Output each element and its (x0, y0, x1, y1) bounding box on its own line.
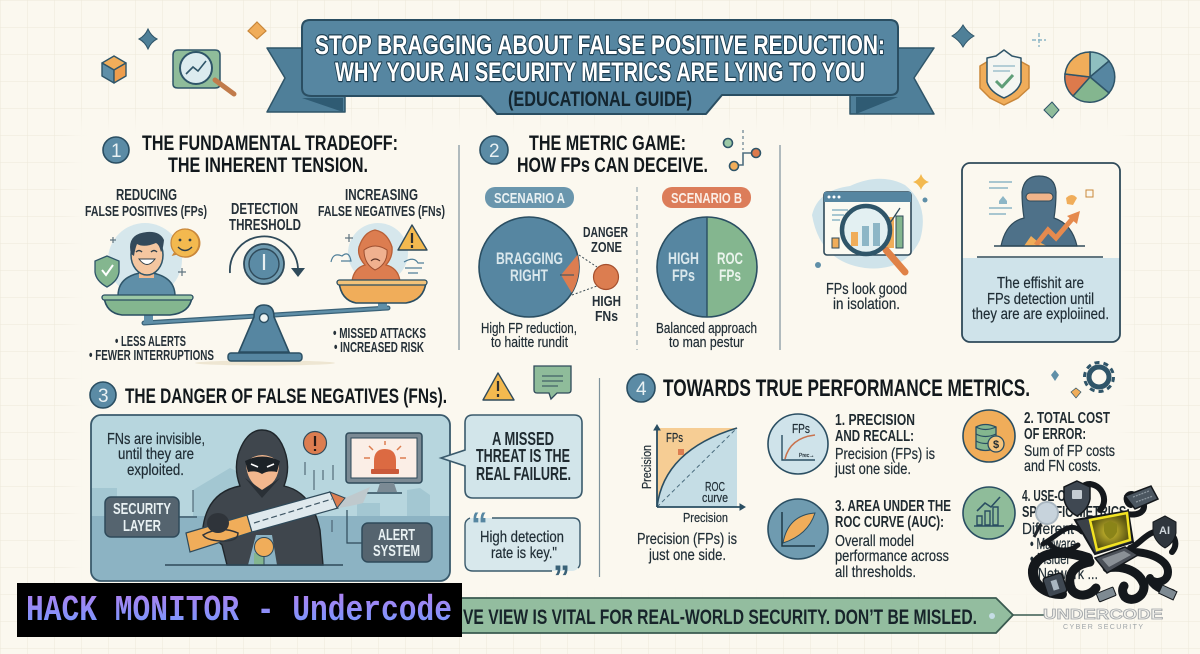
octopus logo (1033, 481, 1177, 631)
card: exploited (962, 163, 1120, 342)
title line 1: STOP BRAGGING ABOUT FALSE POSITIVE REDUCTION: (315, 30, 885, 60)
badge 1 (103, 137, 129, 163)
metric 3: area under roc curve: Overall model (835, 533, 914, 550)
icon: shield badge (980, 50, 1029, 105)
callout: missed threat: REAL FAILURE. (476, 464, 571, 484)
metric 4: use specific metrics: SPECIFIC METRICS: (1022, 504, 1130, 521)
ribbon tail right (850, 48, 934, 114)
callout: missed threat (441, 415, 582, 498)
alert system box: SYSTEM (373, 543, 420, 560)
icon: happy analyst (95, 223, 200, 297)
caption fps in isolation (826, 281, 907, 313)
subtitle: (EDUCATIONAL GUIDE) (508, 88, 692, 111)
section 2 heading (517, 132, 708, 177)
keyboard icon (1125, 486, 1158, 509)
quote box (465, 506, 580, 597)
badge 2: 2 (489, 141, 500, 162)
ai shield icon: AI (1159, 525, 1170, 537)
section 1 heading (142, 132, 398, 177)
list: fp benefits: • LESS ALERTS (115, 333, 186, 350)
metric 3: area under roc curve: 3. AREA UNDER THE (835, 498, 951, 515)
callout: missed threat: THREAT IS THE (476, 446, 570, 466)
metric 4: use specific metrics: 4. USE-CASE (1022, 488, 1086, 505)
section 3: danger of false negatives (90, 366, 582, 597)
icon: blue diamond (139, 29, 157, 49)
list: fn risks: • MISSED ATTACKS (333, 325, 426, 342)
label: increasing false negatives (318, 187, 445, 220)
card text: they are are exploiined. (972, 306, 1109, 323)
scenario b circle: HIGH (668, 249, 699, 268)
quote box: ” (553, 559, 570, 597)
list: fp benefits: • FEWER INTERRUPTIONS (89, 347, 214, 364)
icon: small diamonds (1051, 370, 1081, 398)
icon: hooded hacker (203, 430, 323, 565)
icon: diamond top right (952, 25, 974, 47)
callout: missed threat: A MISSED (492, 429, 554, 449)
section 2 heading: HOW FPs CAN DECEIVE. (517, 154, 708, 177)
roc chart: curve (702, 490, 728, 505)
scenario a circle (479, 217, 585, 317)
metric 3: area under roc curve: performance across (835, 548, 949, 565)
metric 1: precision and recall: 1. PRECISION (835, 412, 915, 429)
section 4 heading: TOWARDS TRUE PERFORMANCE METRICS. (663, 375, 1030, 402)
icon: masked figure with arrow (989, 176, 1093, 246)
metric 4: use specific metrics: • Malware (1030, 536, 1076, 553)
summary banner: VE VIEW IS VITAL FOR REAL-WORLD SECURITY. DON’T BE MISLED. (463, 606, 977, 629)
metric 3: area under roc curve: all thresholds. (835, 564, 916, 581)
quote box: “ (471, 506, 488, 544)
alert system box: ALERT (378, 527, 415, 544)
section 1 heading: THE FUNDAMENTAL TRADEOFF: (142, 132, 398, 155)
scenario b circle (657, 217, 757, 317)
card text (972, 275, 1109, 323)
summary banner (440, 598, 1045, 633)
metric 4: use specific metrics (963, 487, 1130, 583)
icon: speech bubble (534, 366, 571, 399)
danger zone marker: ZONE (591, 239, 622, 256)
scene text: FNs are invisible, (107, 431, 205, 448)
marker pin (254, 538, 274, 565)
icon: orange diamond (248, 22, 266, 39)
card text: FPs detection until (987, 291, 1094, 308)
scenario b circle: FPs (672, 266, 695, 285)
metric 1: precision and recall: AND RECALL: (835, 428, 914, 445)
metric 3: area under roc curve (768, 498, 951, 581)
panel: attacker scene (90, 415, 450, 581)
scene text: until they are (118, 446, 194, 463)
scenario b pill: SCENARIO B (671, 190, 742, 207)
section 3 heading: THE DANGER OF FALSE NEGATIVES (FNs). (125, 385, 447, 408)
danger zone marker: FNs (595, 308, 618, 325)
caption fps in isolation: FPs look good (826, 281, 907, 298)
icon: chart magnifier (173, 50, 234, 94)
banner body (302, 20, 898, 114)
metric 1: precision and recall (768, 412, 935, 478)
icon: warning (483, 373, 514, 400)
list: fn risks: • INCREASED RISK (334, 339, 424, 356)
metric 2: total cost of error (963, 410, 1115, 475)
magnifier icon (1034, 502, 1058, 537)
badge 4: 4 (636, 379, 647, 400)
panel: fps look good (812, 174, 929, 313)
section 2: metric game (479, 130, 760, 351)
scenario a circle: BRAGGING (496, 249, 563, 268)
icon: dashboard magnifier (812, 174, 929, 272)
label: detection threshold: THRESHOLD (229, 217, 301, 234)
scenario b circle: ROC (717, 249, 743, 268)
label: reducing false positives (85, 187, 207, 220)
label: increasing false negatives: FALSE NEGATIVES (FNs) (318, 203, 445, 220)
caption scenario b: to man pestur (669, 334, 744, 351)
tentacles (1033, 484, 1175, 599)
section 2 heading: THE METRIC GAME: (529, 132, 686, 155)
metric 4: use specific metrics: Different (1022, 521, 1074, 538)
hack monitor watermark (17, 583, 462, 637)
caption scenario a: to haitte rundit (491, 334, 569, 351)
metric 4: use specific metrics: • Insider (1030, 551, 1070, 568)
usb plug (1096, 585, 1177, 602)
caption scenario a (481, 320, 577, 351)
metric 1: precision and recall: just one side. (834, 461, 911, 478)
metric 2: total cost of error: 2. TOTAL COST (1024, 410, 1110, 427)
metric 1: precision and recall: Precision (FPs) is (835, 446, 935, 463)
badge 2 (480, 136, 508, 164)
label: increasing false negatives: INCREASING (345, 187, 418, 204)
metric 4: use specific metrics: • Network ... (1030, 566, 1098, 583)
undercode wordmark: UNDERCODE (1043, 606, 1163, 623)
metric 2: total cost of error: and FN costs. (1024, 458, 1101, 475)
label: reducing false positives: FALSE POSITIVES (FPs) (85, 203, 207, 220)
icon: pie chart (1065, 52, 1115, 102)
danger zone marker: HIGH (592, 293, 621, 310)
roc chart (639, 425, 745, 525)
security layer box: LAYER (123, 518, 161, 535)
section 1: tradeoff (85, 132, 445, 366)
scenario a pill: SCENARIO A (494, 190, 565, 207)
quote box: High detection (480, 529, 564, 546)
scenario b circle: FPs (719, 266, 741, 285)
metric 2: total cost of error: OF ERROR: (1024, 426, 1086, 443)
danger zone marker (572, 224, 628, 325)
metric 3: area under roc curve: ROC CURVE (AUC): (835, 514, 944, 531)
badge 3 (90, 382, 116, 408)
scene text (107, 431, 205, 479)
icon: gear (1084, 362, 1114, 392)
laptop body (1075, 511, 1138, 573)
label: reducing false positives: REDUCING (116, 187, 177, 204)
caption fps in isolation: in isolation. (833, 296, 900, 313)
undercode wordmark: CYBER SECURITY (1063, 624, 1143, 631)
icon: nodes (724, 130, 760, 170)
chart caption (637, 531, 737, 564)
alert system box (347, 510, 432, 562)
padlock icon (1042, 572, 1068, 598)
danger zone marker: DANGER (583, 224, 628, 241)
section 4: true performance metrics (627, 374, 1130, 583)
list: fp benefits (89, 333, 214, 364)
shield icon (1064, 481, 1090, 516)
icon: exclamation (304, 432, 326, 454)
metric 2: total cost of error: $ (993, 439, 999, 451)
scene text: exploited. (127, 462, 184, 479)
title banner (267, 20, 934, 114)
scenario a circle: RIGHT (510, 266, 548, 285)
security layer box (105, 497, 197, 537)
badge 1: 1 (111, 141, 122, 162)
roc chart: Precision (683, 510, 728, 525)
badge 3: 3 (98, 386, 109, 407)
list: fn risks (333, 325, 426, 356)
icon: sparkle (1032, 33, 1046, 47)
card text: The effishit are (997, 275, 1084, 292)
caption scenario b (656, 320, 757, 351)
missile pen (186, 487, 370, 552)
undercode wordmark (1043, 606, 1163, 631)
icon: hooded attacker (331, 223, 427, 283)
caption scenario a: High FP reduction, (481, 320, 577, 337)
scenario b pill (662, 187, 751, 208)
icon: balance scale (102, 280, 427, 366)
caption scenario b: Balanced approach (656, 320, 757, 337)
icon: green diamond (1044, 102, 1059, 118)
chart caption: Precision (FPs) is (637, 531, 737, 548)
label: detection threshold: DETECTION (231, 201, 298, 218)
hack monitor watermark: HACK MONITOR - Undercode (26, 590, 452, 631)
title line 2: WHY YOUR AI SECURITY METRICS ARE LYING TO YOU (335, 57, 865, 87)
section 1 heading: THE INHERENT TENSION. (168, 154, 368, 177)
icon: threshold dial (230, 236, 305, 284)
roc chart: FPs (666, 430, 683, 445)
chart caption: just one side. (648, 547, 726, 564)
ribbon tail left (267, 48, 345, 112)
ribbon folds (302, 97, 898, 114)
roc chart: Precision (639, 445, 654, 489)
quote box: rate is key." (491, 545, 557, 562)
label: detection threshold (229, 201, 301, 234)
badge 4 (627, 374, 655, 402)
icon: alarm monitor (346, 433, 422, 493)
scenario a pill (485, 187, 574, 208)
metric 1: precision and recall: FPs (792, 421, 810, 436)
metric 1: precision and recall: Prec→ (799, 453, 814, 459)
icon: cube (102, 56, 126, 83)
roc chart: ROC (705, 479, 725, 494)
security layer box: SECURITY (113, 501, 171, 518)
metric 2: total cost of error: Sum of FP costs (1024, 443, 1115, 460)
ai shield icon (1153, 516, 1176, 548)
